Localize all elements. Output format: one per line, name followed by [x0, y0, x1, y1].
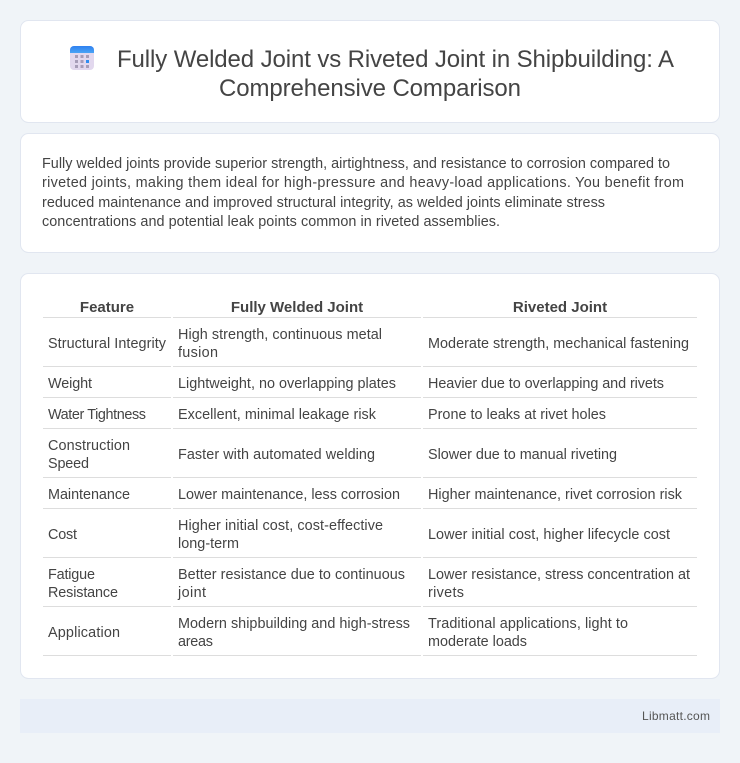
row: application: [48, 616, 628, 650]
row: water tightness: Water Tightness: [48, 407, 146, 423]
title: Fully Welded Joint vs Riveted Joint in Shipbuilding: A: [117, 46, 674, 73]
row: maintenance: Lower maintenance, less corrosion: [178, 487, 400, 503]
comparison table panel: [20, 274, 720, 678]
row: structural integrity: High strength, continuous metal: [178, 327, 382, 343]
row: structural integrity: Moderate strength, mechanical fastening: [428, 336, 689, 352]
row: cost: long-term: [178, 536, 239, 552]
table header: Feature: [80, 299, 134, 316]
row: structural integrity: fusion: [178, 345, 218, 361]
footer bar: [20, 699, 720, 733]
row: construction speed: Construction: [48, 438, 130, 454]
row: application: moderate loads: [428, 634, 527, 650]
row: maintenance: [48, 487, 683, 503]
row: structural integrity: [48, 327, 689, 361]
row: fatigue resistance: Resistance: [48, 585, 118, 601]
title: [117, 46, 674, 102]
header panel: [20, 20, 720, 122]
row: cost: Cost: [48, 527, 77, 543]
row: construction speed: Slower due to manual riveting: [428, 447, 617, 463]
row: fatigue resistance: Better resistance due to continuous: [178, 567, 405, 583]
intro text: concentrations and potential leak points common in riveted assemblies.: [42, 214, 500, 230]
row: application: areas: [178, 634, 213, 650]
row: cost: Lower initial cost, higher lifecycle cost: [428, 527, 670, 543]
table header: Riveted Joint: [513, 299, 607, 316]
row: fatigue resistance: Lower resistance, stress concentration at: [428, 567, 690, 583]
row: water tightness: Prone to leaks at rivet holes: [428, 407, 606, 423]
row: application: Application: [48, 625, 120, 641]
intro text: riveted joints, making them ideal for high-pressure and heavy-load applications. You benefit from: [42, 175, 684, 191]
row: weight: [48, 376, 664, 392]
table header: Fully Welded Joint: [231, 299, 363, 316]
row: weight: Heavier due to overlapping and rivets: [428, 376, 664, 392]
row: maintenance: Higher maintenance, rivet corrosion risk: [428, 487, 683, 503]
row: weight: Lightweight, no overlapping plates: [178, 376, 396, 392]
row: construction speed: Faster with automated welding: [178, 447, 375, 463]
row: water tightness: [48, 407, 606, 423]
table header: [80, 299, 607, 316]
row: construction speed: Speed: [48, 456, 89, 472]
row: water tightness: Excellent, minimal leakage risk: [178, 407, 377, 423]
row: fatigue resistance: rivets: [428, 585, 464, 601]
intro text: [42, 156, 684, 230]
row: cost: [48, 518, 670, 552]
row: cost: Higher initial cost, cost-effective: [178, 518, 383, 534]
row: weight: Weight: [48, 376, 92, 392]
title: Comprehensive Comparison: [219, 75, 521, 102]
row: structural integrity: Structural Integrity: [48, 336, 167, 352]
row: maintenance: Maintenance: [48, 487, 130, 503]
row: fatigue resistance: [48, 567, 690, 601]
row: fatigue resistance: Fatigue: [48, 567, 95, 583]
row: construction speed: [48, 438, 617, 472]
intro text: Fully welded joints provide superior strength, airtightness, and resistance to corrosion compared to: [42, 156, 670, 172]
footer credit: Libmatt.com: [642, 709, 710, 723]
icon: calendar: [70, 46, 94, 70]
intro panel: [20, 134, 720, 252]
row: application: Modern shipbuilding and high-stress: [178, 616, 410, 632]
row: fatigue resistance: joint: [177, 585, 206, 601]
intro text: reduced maintenance and improved structural integrity, as welded joints eliminate stress: [42, 195, 605, 211]
row: application: Traditional applications, light to: [428, 616, 628, 632]
